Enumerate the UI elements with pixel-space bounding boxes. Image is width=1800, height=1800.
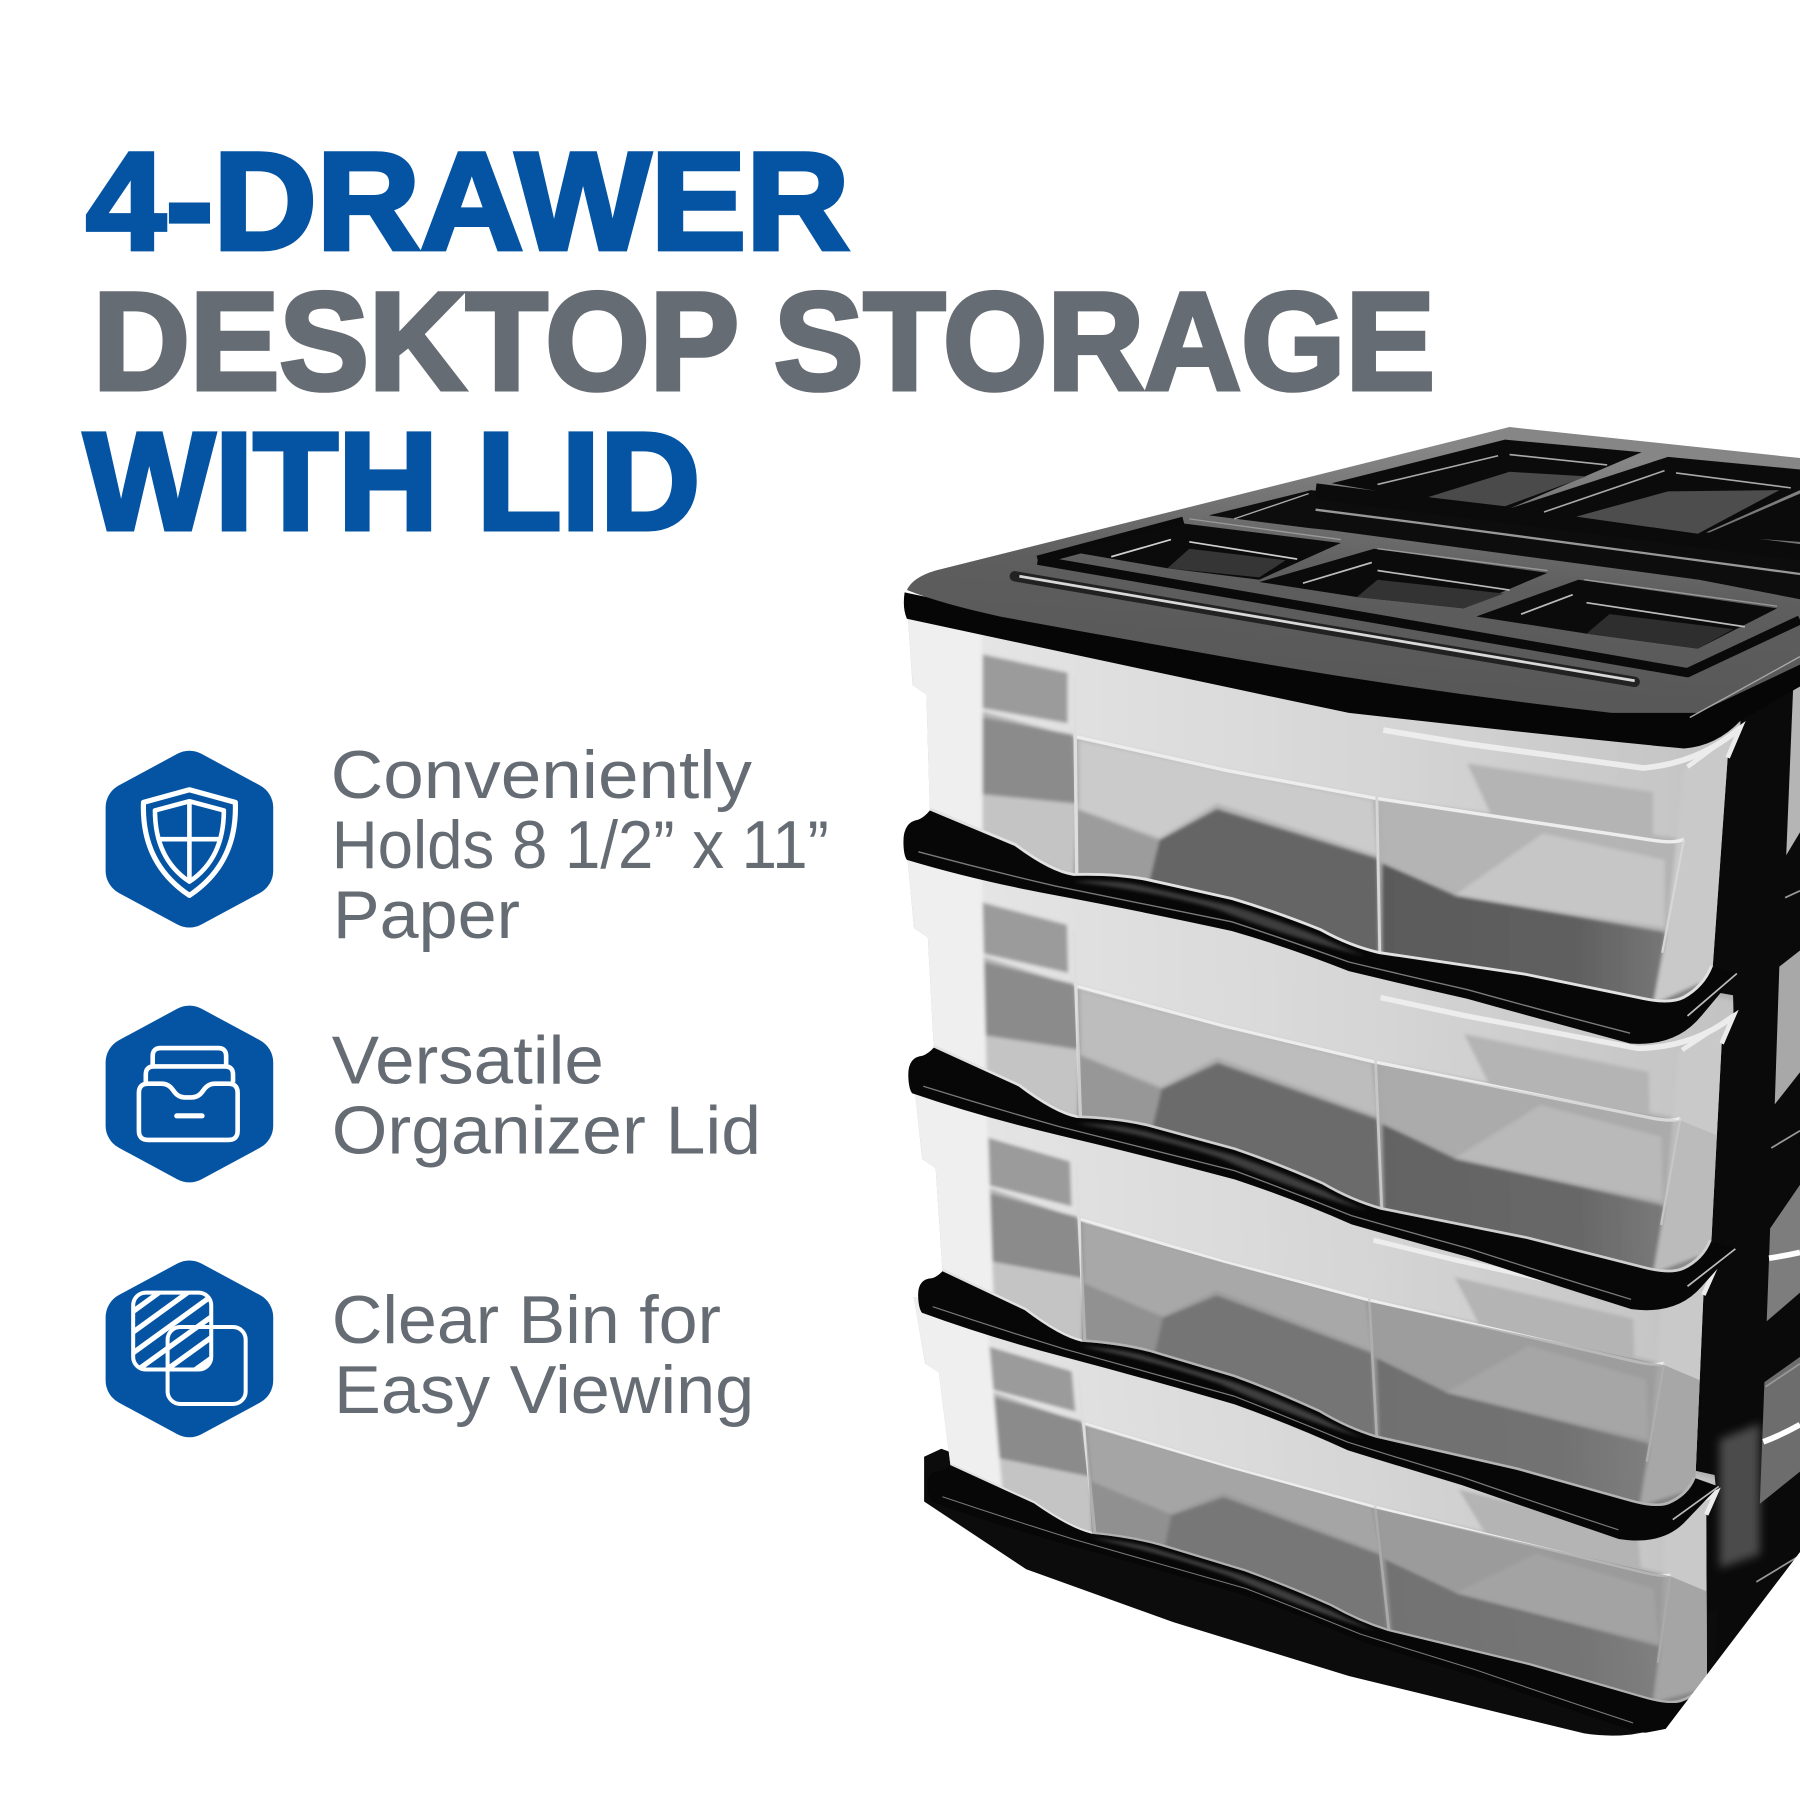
title line: 4-DRAWER: 4-DRAWER <box>86 124 849 279</box>
lid side edge <box>1690 657 1800 717</box>
text: organizer lid <box>332 1024 761 1169</box>
text: paper size <box>331 738 829 953</box>
text: paper size: Holds 8 1/2” x 11” <box>332 808 829 883</box>
tray: back left <box>1332 440 1642 509</box>
text: organizer lid: Versatile <box>332 1024 604 1099</box>
tray: front small left <box>1066 519 1341 580</box>
title line: WITH LID: WITH LID <box>84 404 700 559</box>
feature: organizer lid <box>131 1024 761 1169</box>
text: clear bin: Easy Viewing <box>334 1353 754 1428</box>
feature: paper size <box>131 738 829 953</box>
text: organizer lid: Organizer Lid <box>332 1094 761 1169</box>
base <box>924 1449 1718 1736</box>
tray: back middle <box>1510 457 1800 535</box>
icon: shield in hexagon <box>131 776 248 902</box>
icon: overlapping clear panes in hexagon <box>115 1279 248 1412</box>
drawer 3 <box>909 1080 1728 1549</box>
text: clear bin: Clear Bin for <box>332 1283 721 1358</box>
tray: back right <box>1704 494 1800 542</box>
feature: clear bin <box>115 1279 754 1428</box>
icon: file tray in hexagon <box>131 1031 248 1157</box>
lid <box>904 427 1800 748</box>
text: paper size: Conveniently <box>331 738 752 813</box>
text: clear bin <box>332 1283 754 1428</box>
long back tray <box>1209 490 1800 599</box>
drawer 2 <box>901 843 1745 1316</box>
white corner cleanup <box>1607 1552 1800 1800</box>
tray: front middle <box>1259 549 1547 608</box>
lid top surface <box>907 427 1800 713</box>
pencil groove <box>1015 576 1635 682</box>
product: 4-drawer storage unit <box>901 427 1800 1800</box>
title line: DESKTOP STORAGE: DESKTOP STORAGE <box>93 264 1435 419</box>
title <box>84 124 1435 559</box>
text: paper size: Paper <box>333 878 520 953</box>
lid front band <box>904 592 1800 748</box>
drawer 4 <box>908 1292 1743 1745</box>
side frame column <box>1653 677 1800 1725</box>
tray: front right <box>1476 580 1777 649</box>
drawer 1 <box>901 597 1745 1044</box>
front tray ridge <box>1038 521 1800 673</box>
